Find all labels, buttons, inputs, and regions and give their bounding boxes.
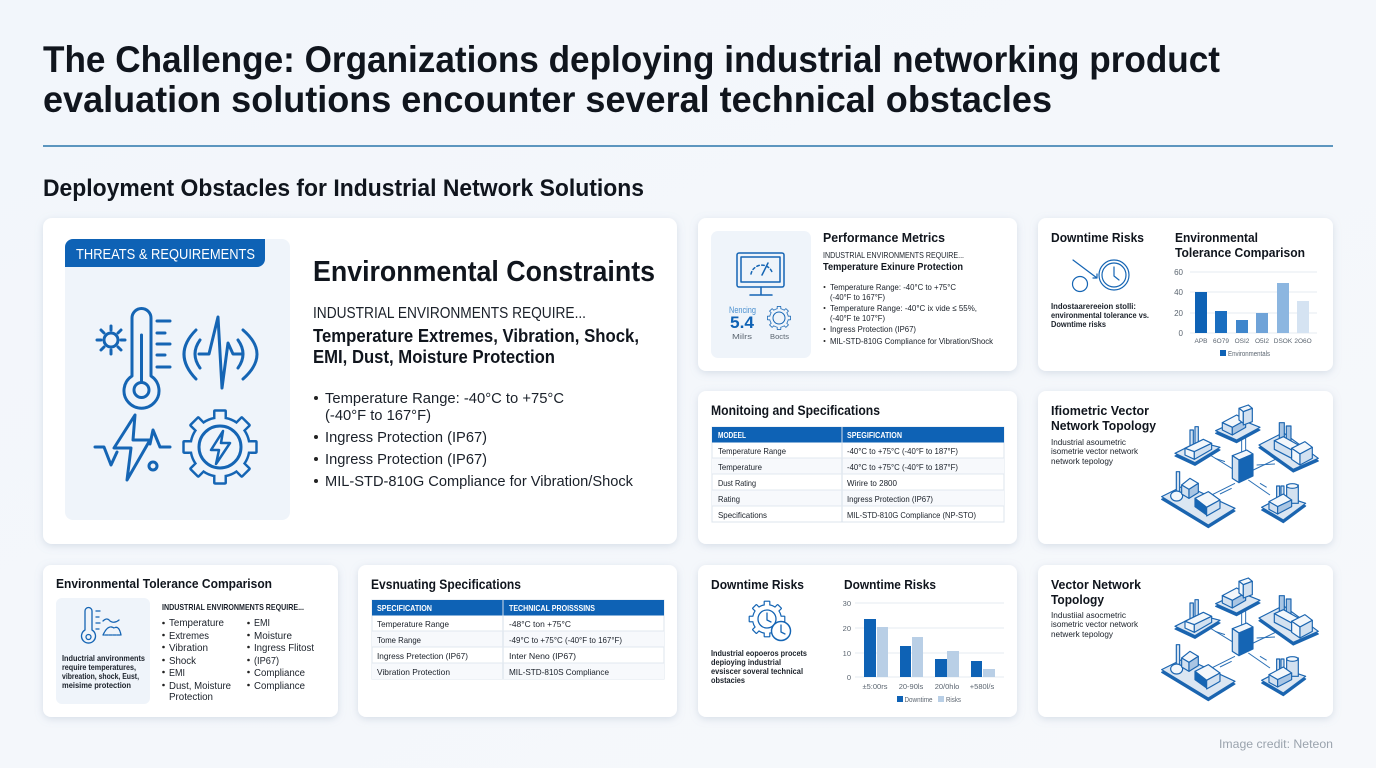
table: Temperature — [718, 462, 762, 472]
table — [372, 600, 664, 679]
bullet list: Temperature Range: -40°C to +75°C — [325, 390, 564, 407]
icon: monitor gauge — [737, 253, 784, 295]
chart heading — [1175, 231, 1305, 260]
chart heading: Downtime Risks — [844, 578, 936, 592]
text block: meisime protection — [62, 680, 131, 690]
bar chart: downtime: Downtime — [904, 697, 933, 704]
text block: netwerk tepology — [1051, 629, 1114, 639]
text block: evsiscer soveral technical — [711, 666, 803, 676]
table: Ingress Protection (IP67) — [847, 494, 933, 504]
title: evaluation solutions encounter several technical obstacles — [43, 79, 1052, 120]
tab: threats and requirements: THREATS & REQUIREMENTS — [76, 246, 255, 263]
table: -40°C to +75°C (-40°F to 187°F) — [847, 446, 958, 456]
bullet list — [314, 390, 633, 490]
icon: thermometer and sun — [97, 309, 170, 408]
table — [712, 427, 1004, 522]
metric: 5.4: 5.4 — [730, 313, 755, 332]
text block: requirements: INDUSTRIAL ENVIRONMENTS REQUIRE... — [313, 305, 586, 322]
table: Ingress Pretection (IP67) — [377, 651, 468, 661]
text block: Industiial asocmetric — [1051, 610, 1127, 620]
bullet list: column 1: Shock — [169, 656, 197, 667]
panel: performance metrics — [698, 218, 1017, 371]
panel: downtime risks and tolerance chart — [1038, 218, 1333, 371]
bar chart: environmental tolerance: 6O79 — [1213, 338, 1229, 345]
bullet list: column 1: Temperature — [169, 618, 224, 629]
table: Tome Range — [377, 635, 421, 645]
bar chart: environmental tolerance: 40 — [1174, 288, 1184, 297]
bullet list — [824, 282, 994, 346]
icon: clock and arrow — [1072, 260, 1129, 292]
bullet list: (-40°F to 167°F) — [830, 292, 885, 302]
icon: thermometer and dust — [82, 608, 121, 643]
diagram: isometric network — [1162, 578, 1318, 701]
text block: isometric vector network — [1051, 619, 1139, 629]
bar chart: environmental tolerance: Environmentals — [1228, 351, 1270, 358]
text block — [711, 648, 807, 685]
bullet list: column 2: Ingress Flitost — [254, 643, 314, 654]
bar chart: environmental tolerance: 0 — [1179, 329, 1184, 338]
text block — [1051, 437, 1139, 466]
bullet list: column 2: Moisture — [254, 631, 292, 642]
table: SPECIFICATION — [377, 604, 432, 613]
bar chart: downtime: Risks — [946, 697, 961, 704]
heading: Monitoing and Specifications — [711, 402, 880, 418]
bar chart: downtime: 10 — [843, 649, 851, 658]
bullet list: column 1: Protection — [169, 692, 213, 703]
table: -40°C to +75°C (-40°F to 187°F) — [847, 462, 958, 472]
text block: Industrial eopoeros procets — [711, 648, 807, 658]
panel: vector network topology — [1038, 565, 1333, 717]
icon: gear with bolt — [182, 409, 258, 485]
bullet list: Temperature Range: -40°C to +75°C — [830, 282, 956, 292]
table: Temperature Range — [718, 446, 786, 456]
table: MIL-STD-810G Compliance (NP-STO) — [847, 510, 976, 520]
bullet list: column 1: EMI — [169, 668, 185, 679]
icon: electrical interference — [95, 415, 170, 480]
bullet list: column 2: Compliance — [254, 668, 305, 679]
table: Vibration Protection — [377, 667, 450, 677]
panel: evaluating specifications — [358, 565, 677, 717]
heading: Evsnuating Specifications — [371, 576, 521, 592]
image credit: Image credit: Neteon — [1219, 737, 1333, 751]
bar chart: downtime: 20/0hlo — [935, 682, 959, 691]
table: MODEEL — [718, 431, 746, 440]
panel: downtime risks chart — [698, 565, 1017, 717]
text block — [1051, 610, 1139, 639]
bar chart: environmental tolerance: OSI2 — [1235, 338, 1250, 345]
bullet list: column 2: Compliance — [254, 681, 305, 692]
panel: environmental constraints — [43, 218, 677, 544]
diagram: isometric network — [1162, 405, 1318, 528]
label: INDUSTRIAL ENVIRONMENTS REQUIRE... — [162, 602, 304, 612]
bar chart: downtime: ±5:00rs — [863, 682, 888, 691]
heading: Topology — [1051, 592, 1105, 607]
bar chart: environmental tolerance: 20 — [1174, 309, 1184, 318]
icon: gear: Bocts — [770, 332, 789, 341]
text block: Inductrial anvironments — [62, 653, 145, 663]
text block: INDUSTRIAL ENVIRONMENTS REQUIRE... — [823, 250, 964, 260]
text block: Indostaarereeion stolli: — [1051, 301, 1136, 311]
chart heading: Environmental — [1175, 231, 1258, 245]
table: Wirire to 2800 — [847, 478, 897, 488]
text block: isometrie vector network — [1051, 446, 1139, 456]
table: Rating — [718, 494, 740, 504]
icon: gear and clock — [749, 601, 790, 640]
metric: 5.4: Nencing — [729, 305, 756, 316]
bullet list: column 2: (IP67) — [254, 656, 279, 667]
text block: requirements: Temperature Extremes, Vibration, Shock, — [313, 325, 639, 346]
text block: vibreation, shock, Eust, — [62, 671, 139, 681]
heading: Vector Network — [1051, 577, 1142, 592]
heading: Environmental Constraints — [313, 256, 655, 288]
bullet list: column 1 — [162, 618, 231, 703]
metric: 5.4 — [729, 305, 756, 341]
table: SPEGIFICATION — [847, 431, 902, 440]
bar chart: downtime: 30 — [843, 599, 851, 608]
text block: requirements — [313, 305, 639, 367]
text block — [823, 250, 964, 273]
bar chart: downtime: 0 — [847, 673, 851, 682]
text block — [1051, 301, 1149, 329]
heading — [1051, 403, 1157, 433]
heading — [1051, 577, 1142, 607]
bullet list: Ingress Protection (IP67) — [325, 451, 487, 468]
icon: gear — [767, 306, 791, 341]
text block: Industrial asoumetric — [1051, 437, 1127, 447]
text block: network tepology — [1051, 456, 1114, 466]
text block: depioying industrial — [711, 657, 781, 667]
heading: Environmental Tolerance Comparison — [56, 576, 272, 591]
bullet list: column 2 — [247, 618, 314, 692]
title — [43, 39, 1220, 120]
table: Specifications — [718, 510, 767, 520]
bullet list: column 1: Dust, Moisture — [169, 681, 231, 692]
table: -48°C ton +75°C — [509, 619, 571, 629]
bullet list: Ingress Protection (IP67) — [830, 324, 916, 334]
metric: 5.4: Milrs — [732, 332, 752, 341]
title: The Challenge: Organizations deploying industrial networking product — [43, 39, 1220, 80]
bullet list: MIL-STD-810G Compliance for Vibration/Shock — [325, 473, 633, 490]
panel: monitoring and specifications — [698, 391, 1017, 544]
heading: Downtime Risks — [711, 578, 804, 592]
bullet list: column 2: EMI — [254, 618, 270, 629]
tab: threats and requirements — [65, 239, 265, 267]
heading: Ifiometric Vector — [1051, 403, 1149, 418]
bar chart: environmental tolerance: APB — [1194, 338, 1208, 345]
heading: Performance Metrics — [823, 230, 945, 245]
bar chart: downtime: +580l/s — [970, 682, 994, 691]
table: Inter Neno (IP67) — [509, 651, 576, 661]
text block: requirements: EMI, Dust, Moisture Protection — [313, 346, 555, 367]
text block: environmental tolerance vs. — [1051, 310, 1149, 320]
text block — [62, 653, 145, 690]
text block: Downtime risks — [1051, 319, 1106, 329]
bullet list: Ingress Protection (IP67) — [325, 429, 487, 446]
text block: Temperature Exinure Protection — [823, 262, 963, 273]
bar chart: downtime — [843, 599, 1004, 704]
table: MIL-STD-810S Compliance — [509, 667, 609, 677]
bar chart: environmental tolerance: O5I2 — [1255, 338, 1269, 345]
text block: require temperatures, — [62, 662, 136, 672]
panel: isometric network topology — [1038, 391, 1333, 544]
bar chart: environmental tolerance: 60 — [1174, 268, 1184, 277]
bullet list: (-40°F to 167°F) — [325, 407, 431, 424]
heading: Downtime Risks — [1051, 231, 1144, 245]
table: Temperature Range — [377, 619, 449, 629]
table: TECHNICAL PROISSSINS — [509, 604, 596, 613]
bullet list: MIL-STD-810G Compliance for Vibration/Shock — [830, 336, 994, 346]
bullet list: column 1: Vibration — [169, 643, 208, 654]
bar chart: environmental tolerance: 2O6O — [1294, 338, 1312, 345]
panel: environmental tolerance comparison — [43, 565, 338, 717]
table: -49°C to +75°C (-40°F to 167°F) — [509, 635, 622, 645]
bullet list: Temperature Range: -40°C ix vide ≤ 55%, — [830, 303, 977, 313]
text block: obstacies — [711, 675, 745, 685]
bar chart: environmental tolerance: DSOK — [1274, 338, 1293, 345]
bar chart: environmental tolerance — [1174, 268, 1317, 358]
heading: Network Topology — [1051, 418, 1157, 433]
bar chart: downtime: 20 — [843, 624, 851, 633]
subtitle: Deployment Obstacles for Industrial Network Solutions — [43, 175, 644, 202]
bullet list: column 1: Extremes — [169, 631, 209, 642]
bullet list: (-40°F te 107°F) — [830, 313, 885, 323]
table: Dust Rating — [718, 478, 756, 488]
icon: vibration wave — [184, 317, 257, 388]
chart heading: Tolerance Comparison — [1175, 246, 1305, 260]
bar chart: downtime: 20-90ls — [899, 682, 924, 691]
